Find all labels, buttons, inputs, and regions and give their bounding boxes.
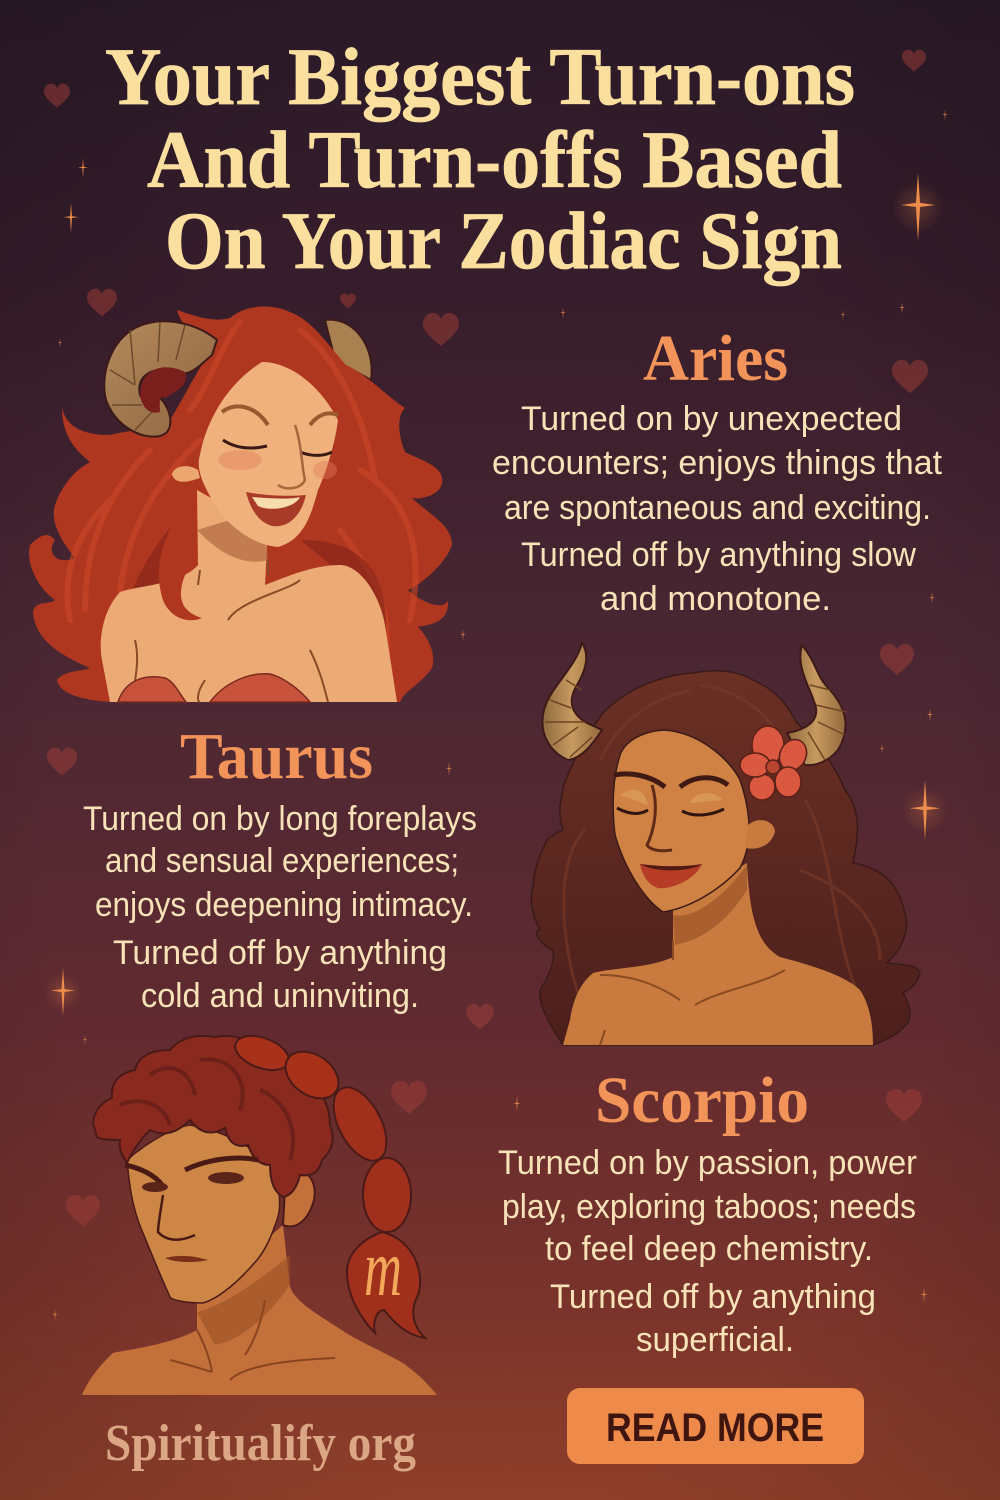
- text: Taurus description: and sensual experiences;: [105, 842, 459, 880]
- text: Scorpio description: play, exploring taboos; needs: [502, 1188, 916, 1226]
- text: Taurus description: Turned on by long foreplays: [83, 800, 477, 838]
- title: Your Biggest Turn-ons: [105, 31, 855, 122]
- button: read more: READ MORE: [606, 1406, 824, 1450]
- hair: [531, 671, 920, 1045]
- decorative sparkles: [43, 109, 949, 1321]
- text: Taurus description: cold and uninviting.: [141, 977, 419, 1015]
- right horn: [325, 320, 372, 380]
- text: Aries description: are spontaneous and exciting.: [504, 489, 931, 527]
- text: Taurus description: [83, 800, 477, 1015]
- decorative hearts: [44, 50, 928, 1226]
- hair: [29, 306, 452, 702]
- front hair strand: [159, 490, 202, 620]
- text: Aries description: [492, 400, 943, 618]
- face: [613, 730, 749, 912]
- text: Scorpio description: Turned on by passion, power: [498, 1144, 917, 1182]
- face: [127, 1125, 280, 1303]
- text: Aries description: Turned off by anything slow: [521, 536, 916, 574]
- illustration: Aries woman with ram horns: [29, 306, 452, 702]
- title: On Your Zodiac Sign: [165, 195, 842, 286]
- heading: Scorpio: Scorpio: [595, 1064, 809, 1137]
- text: Aries description: and monotone.: [600, 580, 831, 618]
- text: Scorpio description: Turned off by anything: [550, 1278, 876, 1316]
- heading: Taurus: Taurus: [180, 720, 373, 793]
- scorpio glyph: m: [364, 1225, 402, 1313]
- flower: [740, 726, 812, 800]
- face: [199, 362, 338, 547]
- text: Aries description: Turned on by unexpected: [521, 400, 902, 438]
- text: Aries description: encounters; enjoys things that: [492, 444, 943, 482]
- hair: [93, 1036, 333, 1197]
- left horn: [104, 321, 217, 437]
- text: Taurus description: enjoys deepening intimacy.: [95, 886, 473, 924]
- right horn: [787, 645, 846, 765]
- title: And Turn-offs Based: [147, 114, 842, 205]
- heading: Aries: Aries: [643, 322, 788, 395]
- text: Scorpio description: [498, 1144, 917, 1359]
- upper tail: [231, 1029, 347, 1108]
- text: Scorpio description: to feel deep chemistry.: [545, 1230, 873, 1268]
- text: Taurus description: Turned off by anything: [113, 934, 447, 972]
- neck and shoulders: [563, 863, 873, 1045]
- lower tail: [323, 1079, 425, 1338]
- bustier: [118, 674, 310, 702]
- button: read more: [567, 1388, 864, 1464]
- text: Scorpio description: superficial.: [636, 1321, 794, 1359]
- facial features: [125, 1158, 258, 1185]
- brand: Spiritualify org: Spiritualify org: [105, 1415, 416, 1472]
- neck and shoulders: [101, 490, 397, 702]
- left horn: [542, 643, 602, 760]
- illustration: Taurus woman with bull horns: [531, 643, 920, 1045]
- ear: [283, 1169, 315, 1226]
- illustration: Scorpio man with tail hair: [82, 1029, 437, 1395]
- title: [105, 31, 855, 286]
- neck and shoulders: [82, 1225, 437, 1395]
